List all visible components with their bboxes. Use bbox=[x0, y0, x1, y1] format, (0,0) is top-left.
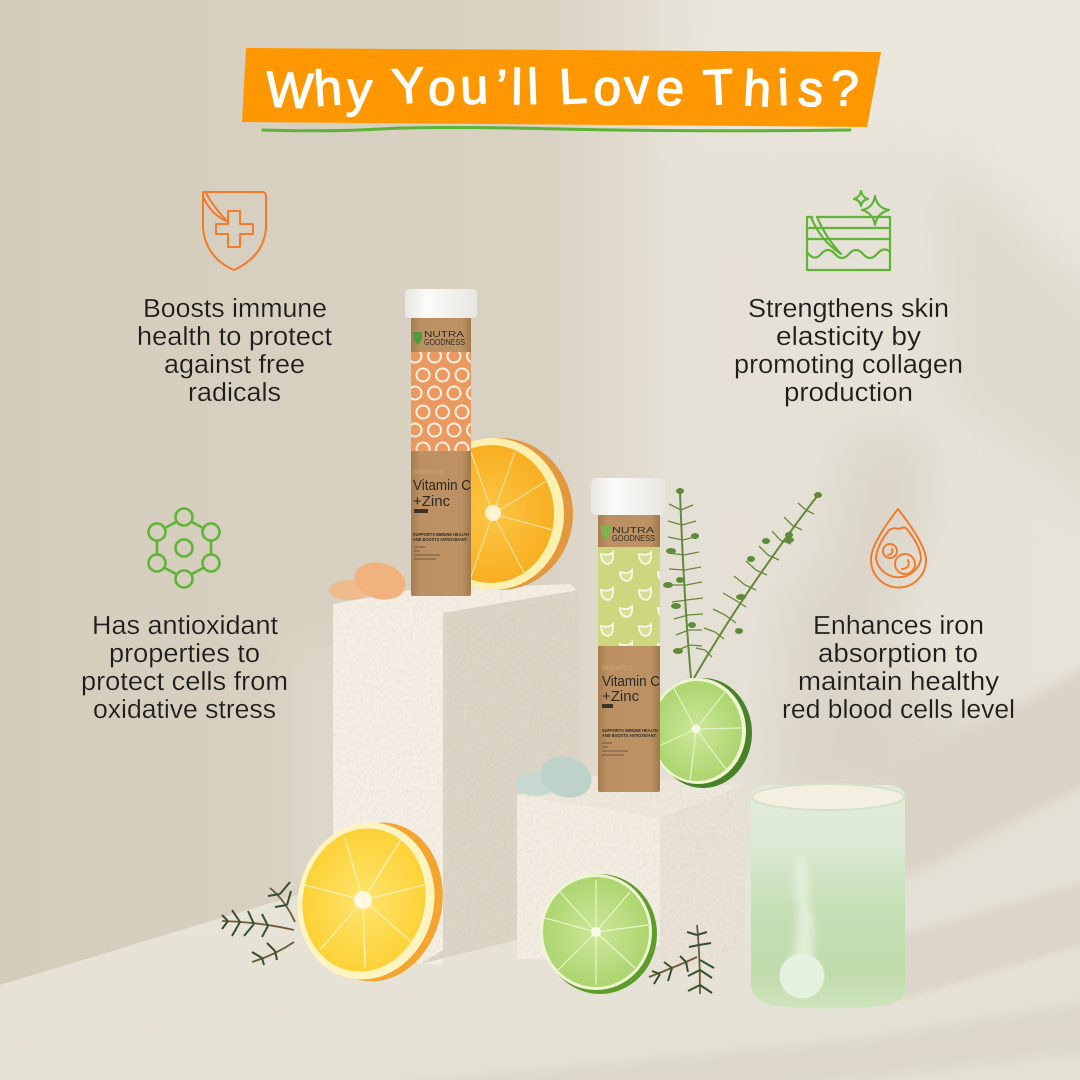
product tube: vitamin C orange bbox=[405, 289, 477, 596]
rosemary sprig left bbox=[222, 882, 295, 965]
orange half behind first tube bbox=[422, 438, 573, 590]
glass body bbox=[751, 785, 905, 1008]
brand bbox=[413, 329, 465, 347]
product label: SUPPORTS IMMUNE HEALTH bbox=[413, 532, 469, 537]
product tube: vitamin C lime bbox=[591, 478, 665, 792]
product label: SUPPORTS IMMUNE HEALTH bbox=[602, 728, 658, 733]
large lemon half bbox=[283, 810, 457, 994]
floor shadow band bbox=[900, 877, 1080, 1002]
text: antioxidant: oxidative stress bbox=[93, 696, 276, 724]
banner shape bbox=[242, 48, 881, 127]
product label bbox=[602, 665, 660, 755]
text: iron absorption bbox=[782, 612, 1015, 724]
product label: Vitamin C bbox=[602, 673, 660, 690]
lime pattern band bbox=[598, 547, 660, 646]
text: immune health: Boosts immune bbox=[143, 295, 327, 323]
title text: You’ll bbox=[390, 57, 539, 116]
brand: NUTRA bbox=[612, 525, 654, 535]
text: antioxidant: properties to bbox=[109, 640, 260, 668]
text: immune health: radicals bbox=[188, 379, 281, 407]
title text: Why bbox=[264, 59, 373, 119]
fizz plume bbox=[792, 850, 814, 960]
product label: AND BOOSTS ANTIOXIDANT bbox=[602, 733, 656, 738]
text: collagen: elasticity by bbox=[776, 323, 921, 351]
title text: This? bbox=[702, 58, 860, 118]
text: collagen: promoting collagen bbox=[734, 351, 963, 379]
title banner bbox=[242, 48, 881, 131]
tablet bbox=[780, 954, 824, 998]
herb sprigs bbox=[663, 488, 822, 678]
icon: shield with cross bbox=[203, 192, 266, 270]
lime half on floor bbox=[540, 874, 657, 994]
product label bbox=[413, 469, 471, 559]
product label: +Zinc bbox=[602, 688, 640, 705]
text: antioxidant bbox=[81, 612, 288, 724]
text: immune health: health to protect bbox=[137, 323, 332, 351]
brand: GOODNESS bbox=[612, 533, 655, 543]
text: collagen: production bbox=[784, 379, 913, 407]
tablets, green bbox=[515, 750, 597, 804]
text: immune health bbox=[137, 295, 332, 407]
tube body bbox=[598, 514, 660, 792]
product label: NutraFizz bbox=[413, 469, 443, 476]
rim bbox=[752, 784, 904, 810]
tall stone pedestal bbox=[333, 584, 578, 964]
title text bbox=[264, 57, 860, 119]
lime half on small pedestal bbox=[650, 678, 752, 788]
text: iron absorption: Enhances iron bbox=[813, 612, 984, 640]
cap bbox=[405, 289, 477, 318]
ring pattern band bbox=[411, 352, 471, 451]
brand bbox=[601, 525, 655, 543]
tube body bbox=[411, 316, 471, 596]
product label: AND BOOSTS ANTIOXIDANT bbox=[413, 537, 467, 542]
brand: GOODNESS bbox=[424, 337, 465, 347]
product label: Vitamin C bbox=[413, 477, 471, 494]
text: collagen bbox=[734, 295, 963, 407]
floor light band bbox=[900, 775, 1080, 935]
product label: +Zinc bbox=[413, 493, 451, 510]
green underline bbox=[263, 128, 850, 131]
glass with green drink and tablet bbox=[751, 784, 905, 1008]
title text: Love bbox=[558, 58, 686, 117]
brand: NUTRA bbox=[424, 329, 464, 339]
text: immune health: against free bbox=[164, 351, 305, 379]
icon: blood drop with cells bbox=[871, 509, 926, 588]
tablets, orange bbox=[329, 557, 410, 605]
text: antioxidant: Has antioxidant bbox=[92, 612, 278, 640]
icon: antioxidant molecule bbox=[148, 508, 220, 588]
text: iron absorption: absorption to bbox=[818, 640, 978, 668]
text: iron absorption: maintain healthy bbox=[798, 668, 999, 696]
text: iron absorption: red blood cells level bbox=[782, 696, 1015, 724]
cap bbox=[591, 478, 665, 515]
product label: NutraFizz bbox=[602, 665, 632, 672]
text: collagen: Strengthens skin bbox=[748, 295, 949, 323]
text: antioxidant: protect cells from bbox=[81, 668, 288, 696]
rosemary sprig right bbox=[649, 925, 714, 994]
icon: skin layers with sparkles bbox=[807, 191, 890, 270]
small stone pedestal bbox=[517, 775, 745, 980]
